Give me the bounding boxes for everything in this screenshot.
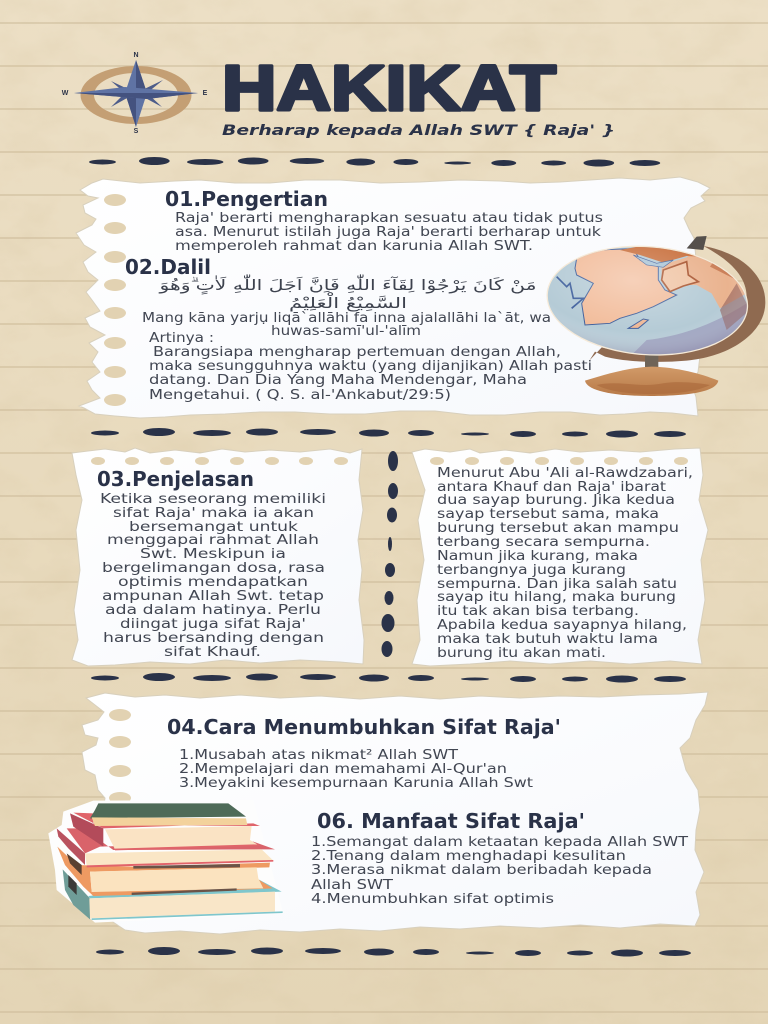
text: artinya: maka sesungguhnya waktu (yang dijanjikan) Allah pasti: [149, 359, 592, 374]
subtitle: Berharap kepada Allah SWT { Raja' }: [222, 123, 615, 139]
text: abu ali quote: terbang secara sempurna.: [437, 535, 650, 550]
text: transliteration: [142, 311, 551, 339]
panel: cara menumbuhkan and manfaat: [82, 692, 708, 934]
text: pengertian: [175, 211, 603, 254]
torn paper sheet: [412, 448, 708, 666]
text: artinya: datang. Dan Dia Yang Maha Mendengar, Maha: [149, 373, 527, 388]
heading: 06 manfaat: 06. Manfaat Sifat Raja': [317, 809, 585, 833]
list: cara menumbuhkan: 3.Meyakini kesempurnaan Karunia Allah Swt: [179, 776, 533, 791]
divider: vertical dashes: [382, 451, 398, 657]
text: artinya: Barangsiapa mengharap pertemuan dengan Allah,: [153, 345, 561, 360]
text: penjelasan: sifat Khauf.: [164, 645, 261, 660]
text: artinya: Mengetahui. ( Q. S. al-'Ankabut/29:5): [149, 388, 451, 403]
list: manfaat: 2.Tenang dalam menghadapi kesulitan: [311, 849, 626, 864]
text: abu ali quote: antara Khauf dan Raja' ibarat: [437, 480, 666, 495]
divider: dashes 2: [91, 428, 686, 438]
text: abu ali quote: burung tersebut akan mampu: [437, 521, 679, 536]
text: arabic verse: مَنْ كَانَ يَرْجُوْا لِقَآءَ اللّٰهِ فَاِنَّ اَجَلَ اللّٰهِ لَاٰتٍ ۗوَهُوَ: [158, 273, 536, 295]
text: abu ali quote: Namun jika kurang, maka: [437, 549, 638, 564]
text: abu ali quote: sayap itu hilang, maka burung: [437, 590, 676, 605]
text: penjelasan: diingat juga sifat Raja': [120, 617, 306, 632]
text: transliteration: huwas-samī'ul-'alīm: [271, 324, 421, 339]
text: pengertian: Raja' berarti mengharapkan sesuatu atau tidak putus: [175, 211, 603, 226]
text: penjelasan: [100, 492, 326, 660]
heading: 03 penjelasan: 03.Penjelasan: [97, 467, 254, 491]
icon: compass rose: [62, 52, 208, 135]
text: penjelasan: optimis mendapatkan: [118, 575, 308, 590]
torn paper sheet: [82, 692, 708, 934]
torn paper sheet: [76, 177, 710, 418]
heading: 01 pengertian: 01.Pengertian: [165, 187, 328, 211]
text: arabic verse: السَّمِيْعُ الْعَلِيْمُ: [289, 292, 407, 312]
divider: dashes 1: [89, 157, 660, 166]
text: penjelasan: sifat Raja' maka ia akan: [113, 506, 314, 521]
icon: compass rose: E: [203, 90, 208, 97]
text: penjelasan: bergelimangan dosa, rasa: [102, 561, 325, 576]
icon: compass rose: N: [133, 52, 139, 59]
icon: stack of books: [48, 800, 283, 923]
heading: 04 cara menumbuhkan: 04.Cara Menumbuhkan Sifat Raja': [167, 715, 561, 739]
panel: pengertian and dalil: [76, 177, 710, 418]
title: HAKIKAT: [222, 52, 556, 124]
text: penjelasan: menggapai rahmat Allah: [107, 533, 319, 548]
text: abu ali quote: dua sayap burung. Jika kedua: [437, 493, 675, 508]
text: artinya: [149, 331, 592, 403]
icon: globe: [543, 236, 765, 396]
text: penjelasan: ada dalam hatinya. Perlu: [105, 603, 321, 618]
icon: compass rose: W: [62, 90, 69, 97]
divider: dashes 3: [91, 673, 686, 682]
torn paper sheet: [72, 448, 364, 666]
text: transliteration: Mang kāna yarjụ liqā`allāhi fa inna ajalallāhi la`āt, wa: [142, 311, 551, 326]
list: manfaat: 3.Merasa nikmat dalam beribadah kepada: [311, 863, 652, 878]
text: abu ali quote: maka tak butuh waktu lama: [437, 632, 658, 647]
text: abu ali quote: sempurna. Dan jika salah satu: [437, 577, 677, 592]
text: penjelasan: harus bersanding dengan: [103, 631, 324, 646]
text: penjelasan: Swt. Meskipun ia: [140, 547, 286, 562]
list: cara menumbuhkan: 2.Mempelajari dan memahami Al-Qur'an: [179, 762, 507, 777]
text: penjelasan: bersemangat untuk: [129, 520, 299, 535]
list: manfaat: Allah SWT: [311, 878, 393, 893]
text: penjelasan: ampunan Allah Swt. tetap: [102, 589, 324, 604]
text: abu ali quote: Menurut Abu 'Ali al-Rawdzabari,: [437, 466, 693, 481]
text: artinya: Artinya :: [149, 331, 214, 346]
text: abu ali quote: burung itu akan mati.: [437, 646, 606, 661]
text: pengertian: asa. Menurut istilah juga Raja' berarti berharap untuk: [175, 225, 602, 240]
text: pengertian: memperoleh rahmat dan karunia Allah SWT.: [175, 239, 533, 254]
panel: penjelasan right: [412, 448, 708, 666]
list: manfaat: 4.Menumbuhkan sifat optimis: [311, 892, 554, 907]
icon: compass rose: S: [134, 128, 139, 135]
divider: dashes 4: [96, 947, 691, 956]
heading: 02 dalil: 02.Dalil: [125, 255, 211, 279]
text: abu ali quote: [437, 466, 693, 661]
list: manfaat: [311, 835, 688, 907]
list: cara menumbuhkan: 1.Musabah atas nikmat² Allah SWT: [179, 748, 458, 763]
text: arabic verse: [158, 273, 536, 312]
panel: penjelasan left: [72, 448, 364, 666]
text: abu ali quote: itu tak akan bisa terbang.: [437, 604, 639, 619]
text: abu ali quote: sayap tersebut sama, maka: [437, 507, 659, 522]
list: cara menumbuhkan: [179, 748, 533, 791]
text: abu ali quote: terbangnya juga kurang: [437, 563, 626, 578]
text: penjelasan: Ketika seseorang memiliki: [100, 492, 326, 507]
list: manfaat: 1.Semangat dalam ketaatan kepada Allah SWT: [311, 835, 688, 850]
text: abu ali quote: Apabila kedua sayapnya hilang,: [437, 618, 687, 633]
